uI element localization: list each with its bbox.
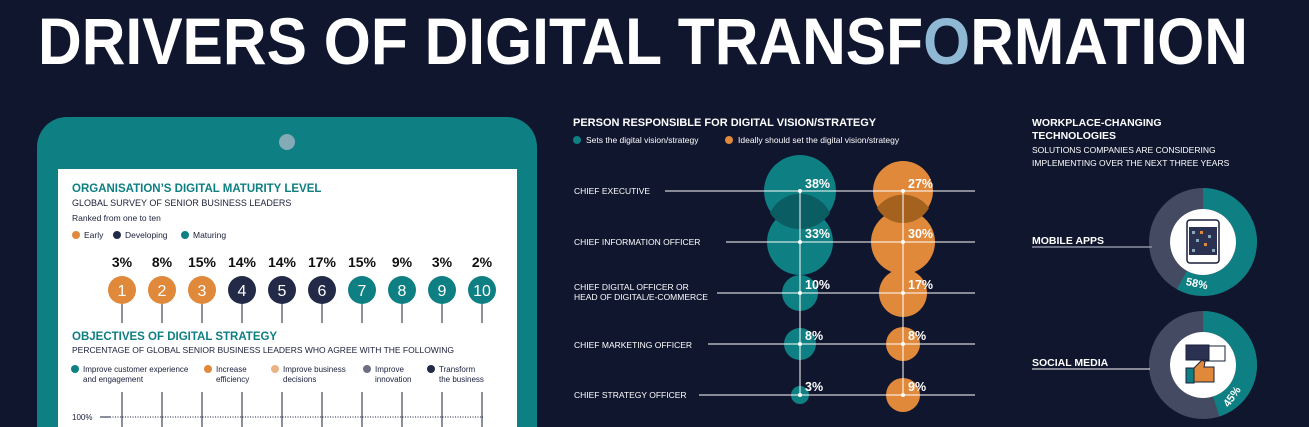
panel: person responsible: HEAD OF DIGITAL/E-COMMERCE xyxy=(574,292,708,302)
panel: workplace technologies xyxy=(1032,117,1246,410)
panel: person responsible: 33% xyxy=(805,227,830,241)
chart: maturity circles: 9 xyxy=(438,283,447,300)
panel: person responsible: 9% xyxy=(908,380,926,394)
chart: maturity circles xyxy=(108,254,496,323)
heading: IMPLEMENTING OVER THE NEXT THREE YEARS xyxy=(1032,158,1230,168)
chart: objectives axis: 100% xyxy=(72,413,92,422)
panel: person responsible: CHIEF STRATEGY OFFICER xyxy=(574,390,687,400)
chart: maturity circles: 10 xyxy=(473,283,491,300)
panel: person responsible: CHIEF EXECUTIVE xyxy=(574,186,650,196)
legend: maturity: Developing xyxy=(125,230,168,240)
donut: mobile apps xyxy=(1160,198,1246,292)
panel: person responsible: 10% xyxy=(805,278,830,292)
heading: PERSON RESPONSIBLE FOR DIGITAL VISION/STRATEGY xyxy=(573,117,877,129)
heading: SOLUTIONS COMPANIES ARE CONSIDERING xyxy=(1032,145,1216,155)
panel: person responsible: 38% xyxy=(805,177,830,191)
icon: tablet xyxy=(1187,220,1219,263)
chart: maturity circles: 14% xyxy=(268,254,297,270)
heading: objectives: PERCENTAGE OF GLOBAL SENIOR BUSINESS LEADERS WHO AGREE WITH THE FOLLOWING xyxy=(72,345,454,355)
chart: maturity circles: 4 xyxy=(238,283,247,300)
legend: objectives: decisions xyxy=(283,375,316,384)
heading xyxy=(1032,117,1230,168)
heading: maturity: ORGANISATION’S DIGITAL MATURITY LEVEL xyxy=(72,183,321,195)
legend: objectives xyxy=(71,365,484,384)
heading: maturity xyxy=(72,183,321,223)
chart: maturity circles: 7 xyxy=(358,283,367,300)
panel: person responsible: 30% xyxy=(908,227,933,241)
heading: maturity: Ranked from one to ten xyxy=(72,213,161,223)
icon: chat thumbs up xyxy=(1186,345,1225,383)
chart: maturity circles: 14% xyxy=(228,254,257,270)
row lines and labels xyxy=(665,191,975,395)
legend xyxy=(573,135,900,145)
chart: maturity circles: 15% xyxy=(348,254,377,270)
panel: person responsible: CHIEF DIGITAL OFFICER OR xyxy=(574,282,689,292)
heading: objectives: OBJECTIVES OF DIGITAL STRATEGY xyxy=(72,331,277,343)
donut: social media: 45% xyxy=(1221,384,1244,410)
panel: person responsible: CHIEF MARKETING OFFICER xyxy=(574,340,692,350)
donut: mobile apps: 58% xyxy=(1185,276,1209,292)
chart: maturity circles: 2 xyxy=(158,283,167,300)
legend: objectives: and engagement xyxy=(83,375,144,384)
panel: person responsible: 27% xyxy=(908,177,933,191)
label: social media: SOCIAL MEDIA xyxy=(1032,357,1109,369)
legend: Ideally should set the digital vision/strategy xyxy=(738,135,900,145)
legend: maturity: Maturing xyxy=(193,230,226,240)
chart: maturity circles: 5 xyxy=(278,283,287,300)
chart: maturity circles: 3% xyxy=(432,254,453,270)
legend: objectives: the business xyxy=(439,375,484,384)
chart: maturity circles: 8% xyxy=(152,254,173,270)
panel: person responsible: 17% xyxy=(908,278,933,292)
panel: person responsible: 8% xyxy=(805,329,823,343)
legend: maturity: Early xyxy=(84,230,104,240)
panel: person responsible: 8% xyxy=(908,329,926,343)
donut: social media xyxy=(1160,322,1246,410)
chart: maturity circles: 3 xyxy=(198,283,207,300)
chart: maturity circles: 3% xyxy=(112,254,133,270)
chart: maturity circles: 17% xyxy=(308,254,337,270)
legend: objectives: Transform xyxy=(439,365,475,374)
legend: objectives: Improve xyxy=(375,365,404,374)
chart: maturity circles: 15% xyxy=(188,254,217,270)
heading: WORKPLACE-CHANGING xyxy=(1032,117,1162,129)
label: social media xyxy=(1032,357,1150,369)
label: mobile apps: MOBILE APPS xyxy=(1032,235,1104,247)
legend: Sets the digital vision/strategy xyxy=(586,135,699,145)
panel: person responsible xyxy=(573,117,975,412)
icon: camera dot xyxy=(279,134,295,150)
label: mobile apps xyxy=(1032,235,1152,247)
bubbles xyxy=(764,155,935,412)
panel: person responsible: CHIEF INFORMATION OFFICER xyxy=(574,237,700,247)
heading: objectives xyxy=(72,331,454,355)
chart: maturity circles: 6 xyxy=(318,283,327,300)
legend: objectives: Improve business xyxy=(283,365,346,374)
panel: person responsible: 3% xyxy=(805,380,823,394)
chart: maturity circles: 2% xyxy=(472,254,493,270)
legend: objectives: Increase xyxy=(216,365,247,374)
title: DRIVERS OF DIGITAL TRANSFORMATION xyxy=(38,4,1248,78)
heading: TECHNOLOGIES xyxy=(1032,130,1116,142)
chart: maturity circles: 9% xyxy=(392,254,413,270)
legend: objectives: Improve customer experience xyxy=(83,365,189,374)
chart: maturity circles: 1 xyxy=(118,283,127,300)
heading: maturity: GLOBAL SURVEY OF SENIOR BUSINESS LEADERS xyxy=(72,198,291,208)
legend: objectives: efficiency xyxy=(216,375,249,384)
legend: maturity xyxy=(72,230,226,240)
chart: maturity circles: 8 xyxy=(398,283,407,300)
legend: objectives: innovation xyxy=(375,375,411,384)
panel: tablet xyxy=(37,117,537,427)
